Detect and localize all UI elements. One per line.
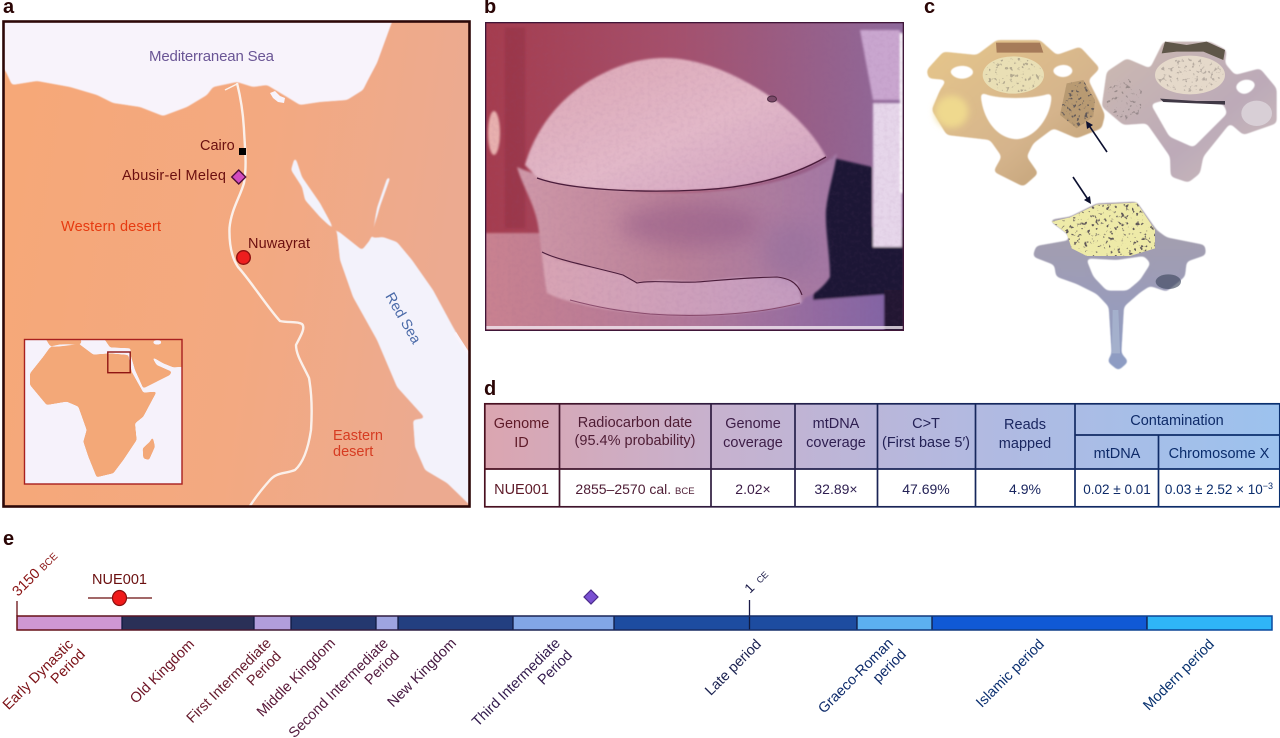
table header text: Genome [494, 416, 549, 432]
label: First Intermediate Period: Period [244, 649, 285, 689]
label: Modern period: Modern period [1140, 637, 1218, 714]
label: Second Intermediate Period: Period [362, 648, 403, 688]
vertebra bottom [1033, 200, 1206, 371]
label: Eastern desert: desert [333, 444, 373, 460]
photo backdrop and table [485, 28, 904, 331]
label: Red Sea: Red Sea [382, 290, 424, 348]
vertebra top right [1102, 42, 1277, 183]
label: Early Dynastic Period: Period [48, 647, 89, 687]
Africa landmass [30, 345, 157, 477]
table data row: 0.03 ± 2.52 × 10 [1165, 482, 1263, 497]
tick 1 CE: 1 CE [742, 567, 771, 596]
label: Old Kingdom: Old Kingdom [127, 637, 198, 707]
arrow upper [1086, 121, 1107, 152]
inset: map of Africa [24, 335, 187, 484]
timeline bar [17, 616, 1272, 630]
panel: genome table [484, 403, 1280, 507]
start tick 3150 BCE: 3150 BCE [10, 548, 61, 600]
label: New Kingdom: New Kingdom [385, 636, 460, 711]
label: Graeco-Roman period: Graeco-Roman [815, 636, 897, 717]
table header text: coverage [806, 435, 866, 451]
arrow lower [1073, 177, 1091, 204]
label: Late period: Late period [702, 637, 765, 699]
panel label d: d [484, 378, 496, 400]
tick 1 CE [742, 567, 771, 616]
Madagascar [143, 437, 155, 460]
vertebra top left [927, 40, 1105, 187]
Mediterranean Sea shape [4, 22, 392, 116]
marker: Abusir-el Meleq: Abusir-el Meleq [122, 168, 226, 184]
pot hole [768, 96, 776, 102]
panel: timeline [0, 548, 1272, 738]
label: Middle Kingdom: Middle Kingdom [254, 636, 339, 720]
label: Third Intermediate Period: Third Intermediate [469, 636, 564, 730]
table data row: 4.9% [1009, 481, 1041, 497]
Red Sea shape [290, 159, 468, 504]
Europe edge [46, 340, 82, 348]
table data row: NUE001 [494, 482, 549, 498]
label: Third Intermediate Period: Period [535, 648, 576, 688]
table data row: 2855–2570 cal. BCE [575, 481, 695, 497]
table data row: −3 [1263, 481, 1273, 491]
Nile river [229, 83, 312, 506]
marker: NUE001 date range [88, 572, 152, 606]
table header text [494, 413, 1270, 462]
table header text: C>T [912, 416, 940, 432]
label: Western desert: Western desert [61, 219, 161, 235]
table header background [484, 403, 1280, 469]
table header text: Genome [725, 416, 781, 432]
table data row: 32.89× [814, 481, 858, 497]
period labels [0, 636, 1218, 738]
table data row: 2.02× [735, 481, 771, 497]
table data row: 0.02 ± 0.01 [1083, 482, 1151, 497]
table grid [484, 403, 1280, 507]
table header text: (First base 5′) [882, 435, 970, 451]
panel: photograph of ceramic pot [485, 22, 904, 331]
table data row: 47.69% [902, 481, 950, 497]
marker: Nuwayrat: Nuwayrat [248, 236, 310, 252]
pot cracks and rim [537, 157, 826, 315]
marker: Nuwayrat [237, 236, 310, 264]
table header text: mtDNA [813, 416, 860, 432]
table header text: (95.4% probability) [575, 433, 695, 449]
Asia and Arabia landmass [105, 340, 182, 390]
Lake Bardawil [270, 91, 285, 103]
table header text: Contamination [1130, 413, 1224, 429]
table data row [494, 481, 1273, 498]
table header text: Radiocarbon date [578, 415, 692, 431]
table header text: coverage [723, 435, 783, 451]
label: Graeco-Roman period: period [870, 647, 910, 686]
marker: NUE001 date range: NUE001 [92, 572, 147, 588]
label: Islamic period: Islamic period [973, 637, 1048, 711]
table header text: Chromosome X [1169, 446, 1270, 462]
table header text: ID [514, 435, 529, 451]
panel: map of Egypt [0, 0, 490, 515]
table header text: mtDNA [1094, 446, 1141, 462]
panel label e: e [3, 528, 14, 550]
inset locator box [108, 352, 130, 373]
panel: vertebrae photographs [927, 40, 1277, 371]
table header text: mapped [999, 436, 1051, 452]
table header text: Reads [1004, 417, 1046, 433]
marker: Abusir-el Meleq diamond [584, 590, 598, 604]
label: First Intermediate Period: First Intermediate [184, 636, 275, 727]
marker: Cairo: Cairo [200, 138, 235, 154]
label: Early Dynastic Period: Early Dynastic [0, 637, 77, 713]
label: Mediterranean Sea: Mediterranean Sea [149, 48, 275, 65]
pot [517, 58, 837, 315]
label: Eastern desert: Eastern [333, 428, 383, 444]
